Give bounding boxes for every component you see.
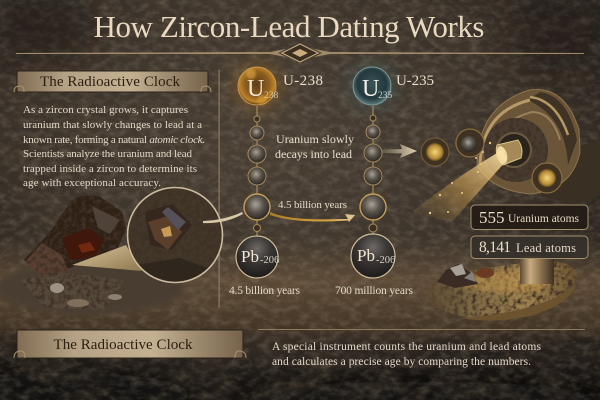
pointer from bead to magnifier (203, 212, 243, 223)
zircon sample rocks (437, 264, 494, 288)
instrument platter with sample (415, 262, 577, 321)
isotope: U-235 (347, 61, 434, 111)
bottom divider (258, 329, 585, 330)
sphere: Pb-206 left: -206 (260, 255, 279, 266)
text block: radioactive clock explanation: known rate, forming a natural atomic clock. (23, 134, 205, 146)
decay chain: U-235 (360, 106, 386, 236)
banner: The Radioactive Clock (top) (14, 71, 211, 92)
stat box: uranium atoms: 555 (479, 208, 504, 227)
stat box: uranium atoms (471, 205, 588, 230)
instrument bead: lower gold (532, 163, 562, 193)
isotope: U-238: U (247, 76, 264, 102)
text block: radioactive clock explanation: uranium that slowly changes to lead at a (23, 119, 202, 131)
sphere: Pb-206 left (236, 236, 279, 278)
zircon crystal on rock pile (0, 196, 185, 314)
instrument pillar (520, 256, 554, 284)
text block: instrument explanation: A special instrument counts the uranium and lead atoms (272, 341, 542, 353)
label: uranium slowly decays into lead: decays into lead (275, 147, 352, 161)
sphere: Pb-206 left: Pb (241, 247, 259, 266)
text block: radioactive clock explanation: trapped inside a zircon to determine its (23, 163, 197, 175)
title: How Zircon-Lead Dating Works (94, 9, 484, 44)
label: uranium slowly decays into lead (275, 132, 354, 161)
text block: radioactive clock explanation: age with exceptional accuracy. (23, 177, 161, 189)
banner: The Radioactive Clock (bottom) (14, 330, 246, 358)
isotope: U-235: U-235 (396, 73, 434, 89)
instrument bead: gold (421, 138, 449, 166)
isotope: U-238: U-238 (283, 73, 323, 89)
text block: radioactive clock explanation: Scientists analyze the uranium and lead (23, 148, 192, 160)
magnifier wedge (72, 245, 142, 271)
label: 4.5 billion years under lead: 4.5 billion years (229, 285, 301, 297)
banner: The Radioactive Clock (top): The Radioactive Clock (40, 74, 180, 90)
text block: radioactive clock explanation: As a zircon crystal grows, it captures (23, 104, 188, 116)
instrument bead: grey (456, 129, 484, 157)
arrow: decay to instrument (382, 144, 417, 158)
text block: instrument explanation: and calculates a precise age by comparing the numbers. (272, 356, 531, 368)
sphere: Pb-206 right (351, 234, 395, 278)
decay chain: U-238 (244, 106, 270, 236)
vertical divider (218, 70, 220, 308)
stat box: uranium atoms: Uranium atoms (508, 213, 580, 225)
stat box: lead atoms: Lead atoms (516, 241, 576, 255)
isotope: U-238: 238 (264, 91, 278, 101)
label: 4.5 billion years: 4.5 billion years (278, 199, 347, 211)
sparks in beam (429, 142, 491, 214)
label: 700 million years under lead: 700 million years (335, 285, 414, 297)
isotope: U-238 (231, 60, 323, 112)
sphere: Pb-206 right: -206 (376, 255, 395, 266)
banner: The Radioactive Clock (bottom): The Radioactive Clock (54, 337, 193, 353)
stat box: lead atoms: 8,141 (479, 239, 511, 256)
isotope: U-235: U (362, 76, 379, 102)
stat box: lead atoms (471, 236, 588, 258)
beam of light (412, 150, 507, 222)
label: uranium slowly decays into lead: Uranium slowly (276, 132, 354, 146)
title divider ornament (16, 44, 584, 62)
arrow: gold time arrow (270, 212, 355, 222)
sphere: Pb-206 right: Pb (357, 246, 375, 265)
text block: instrument explanation (272, 341, 542, 368)
magnified zircon circle (125, 185, 225, 285)
instrument: brass dome with nozzle (477, 90, 600, 205)
text block: radioactive clock explanation (23, 104, 205, 189)
isotope: U-235: 235 (378, 91, 392, 101)
